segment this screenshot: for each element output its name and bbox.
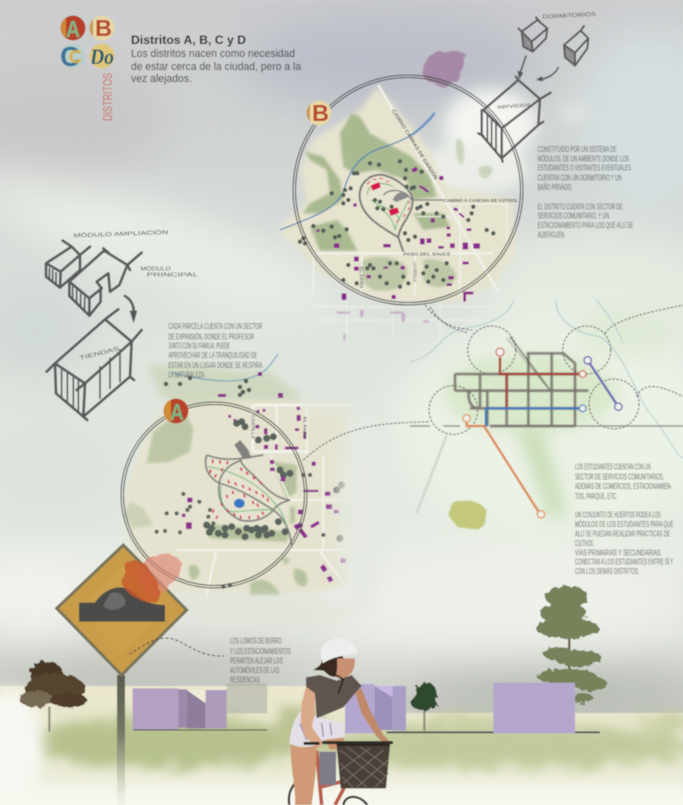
badge: A on map: A	[170, 399, 184, 425]
map B: trees	[300, 161, 493, 287]
purple buildings left	[133, 688, 267, 730]
text: speed bumps description: RESIDENCIAS	[230, 674, 260, 684]
map B: road labels: CAMINO CABRAS DE GARZÓN	[390, 107, 440, 181]
map B: river	[280, 113, 435, 230]
vertical label: DISTRITOS: DISTRITOS	[100, 73, 115, 121]
map: district A	[123, 400, 350, 595]
text: students services description	[575, 462, 674, 576]
cyclist helmet strap	[333, 673, 343, 693]
text: students services description: TOS, PARQUE, ETC.	[575, 491, 617, 501]
badge A: A	[66, 16, 80, 42]
text: district B description: CONSTITUIDO POR UN SISTEMA DE	[538, 144, 617, 154]
purple building right	[493, 683, 575, 733]
plan: red line	[496, 348, 586, 408]
map A: white streets	[177, 405, 350, 595]
map A: buildings	[182, 407, 346, 582]
horizon scene right: buildings, trees, cyclist	[289, 586, 607, 805]
sketch: modulo ampliacion, principal and tiendas	[46, 229, 198, 420]
map B: student blocks	[371, 182, 399, 216]
sketch label: modulo ampliacion: MÓDULO AMPLIACIÓN	[73, 229, 168, 239]
text: speed bumps description: AUTOMÓVILES DE LAS	[230, 665, 280, 675]
map A: land base	[123, 400, 350, 593]
badge: B on map	[306, 100, 332, 126]
bicycle frame	[317, 751, 348, 805]
watercolor blob: orange	[122, 553, 182, 602]
map: district A surroundings	[148, 354, 300, 430]
text: district A description: LA NATURALEZA.	[168, 369, 206, 379]
badge: B on map: B	[312, 100, 329, 126]
map B: faded extension	[313, 300, 493, 341]
dashed link: circle B to plan	[425, 305, 472, 330]
horizon scene left: tree, sign, buildings	[19, 545, 291, 805]
bicycle basket	[337, 745, 390, 788]
sketch label: servicios: servicios	[497, 102, 531, 111]
map A: green paths	[208, 467, 287, 527]
text: district A description: CADA PARCELA CUENTA CON UN SECTOR	[168, 321, 262, 331]
sketch label: modulo principal: PRINCIPAL	[147, 273, 198, 279]
map A: red plots	[210, 460, 268, 518]
plan: blue line	[486, 405, 586, 427]
map B: road labels: EL FARO	[358, 267, 364, 288]
plan: rivers	[410, 300, 683, 458]
sketch label: modulo principal: MÓDULO	[141, 266, 171, 273]
dashed callout from sign to text	[129, 638, 224, 656]
text: speed bumps description: LOS LOMOS DE BURRO	[230, 635, 282, 645]
tree cluster above circle A	[166, 378, 249, 395]
badge C: C	[69, 47, 82, 67]
intro text: vez alejados.	[131, 73, 192, 85]
seat post and saddle area	[319, 752, 336, 785]
sketch label: modulo principal	[141, 266, 198, 279]
left tree	[19, 661, 87, 732]
ground and grass	[0, 686, 683, 805]
cyclist right arm	[355, 688, 392, 746]
text: district A description: APROVECHAR DE LA TRANQUILIDAD DE	[168, 350, 258, 360]
map B: residential loop road	[360, 175, 443, 252]
map B: road labels: CAMINO A CANCHA DE FÚTBOL	[443, 197, 518, 204]
map: district B	[280, 85, 518, 341]
map A: trees	[157, 422, 342, 587]
header icons: district badges	[60, 15, 114, 72]
small dark tree	[411, 683, 437, 731]
map A: road labels: CASTILLA	[249, 415, 255, 439]
circle B outline	[293, 75, 523, 305]
plan: orange line	[463, 415, 545, 518]
intro text: Los distritos nacen como necesidad	[131, 48, 295, 60]
badge: A on map	[164, 398, 188, 425]
text: district B description: BAÑO PRIVADO.	[538, 182, 573, 192]
text: speed bumps description: Y LOS ESTACIONAMIENTOS	[230, 646, 291, 656]
lots above circle A	[218, 372, 283, 398]
map B: road labels: LA CASTILLA	[411, 262, 417, 282]
plan: main road	[410, 423, 683, 428]
text: speed bumps description	[230, 635, 291, 684]
circle A outline	[121, 402, 307, 588]
sketch: servicios module	[478, 77, 551, 162]
sketch: dormitorios and servicios modules	[478, 12, 596, 162]
map B: green paths	[367, 184, 408, 230]
translucent panel behind text	[227, 683, 267, 713]
cyclist left arm	[301, 687, 323, 748]
text: district B description: ALBERGUEN.	[538, 229, 565, 239]
sketch: dormitorio 1	[518, 17, 547, 52]
cyclist hair	[313, 654, 343, 678]
cyclist shorts	[289, 712, 345, 747]
text: district B description: SERVICIOS COMUNITARIO, Y UN	[538, 211, 609, 221]
badge C	[60, 44, 86, 68]
intro text: de estar cerca de la ciudad, pero a la	[131, 61, 302, 73]
map B: road labels	[358, 107, 518, 288]
text: district B description	[538, 144, 634, 239]
text: district A description: DE EXPANSIÓN, DONDE EL PROFESOR	[168, 331, 254, 341]
map A: pond	[234, 499, 245, 508]
sketch: module ampliacion	[46, 241, 90, 288]
map A: vegetation	[123, 408, 307, 595]
purple building middle	[345, 684, 406, 733]
right tall tree	[536, 586, 607, 704]
map B: white streets	[313, 85, 507, 295]
sketch: tiendas module	[47, 309, 142, 420]
map B: road labels: PASO DEL SAUCE	[403, 251, 451, 257]
sketch: module principal	[69, 248, 142, 316]
signpost	[117, 675, 125, 805]
sketch: arrow down	[125, 296, 137, 323]
plan: green surroundings	[443, 310, 670, 520]
sketch: arrows to servicios	[517, 56, 558, 81]
map B: red dots	[367, 178, 409, 222]
text: district A description: JUNTO CON SU FAMILIA, PUEDE	[168, 341, 230, 351]
bicycle wheels	[289, 783, 367, 805]
stream above circle A	[170, 354, 278, 381]
badge C: C	[60, 41, 80, 72]
text: district A description	[168, 321, 263, 379]
urban plan: road network and connections	[303, 300, 683, 520]
badge B: B	[95, 15, 112, 41]
cyclist	[289, 638, 392, 805]
map B: land base	[280, 87, 515, 302]
watercolor blob: olive	[449, 501, 487, 528]
plan: district connection dashes	[303, 305, 683, 460]
sketch label: dormitorios: DORMITORIOS	[542, 12, 596, 21]
plan: street grid	[455, 337, 588, 426]
sketch label: tiendas: TIENDAS	[79, 346, 120, 362]
text: district A description: ESTAR EN UN LUGAR DONDE SE RESPIRA	[168, 360, 263, 370]
cyclist neck and face	[335, 658, 355, 680]
badge D: Do	[89, 44, 114, 69]
vegetation patch above circle A	[148, 365, 300, 430]
watercolor blob: purple	[422, 51, 468, 86]
intro text	[131, 48, 302, 85]
map B: buildings	[317, 167, 480, 302]
sketch: dormitorio 2	[564, 26, 588, 66]
cyclist shirt	[306, 675, 362, 718]
text: students services description: CULTIVOS.	[575, 538, 594, 548]
cyclist leg	[291, 743, 317, 805]
speed bump road sign	[57, 545, 187, 675]
heading: Distritos A, B, C y D	[131, 33, 246, 47]
plan: purple line	[584, 357, 622, 410]
bicycle handlebar	[305, 738, 392, 748]
map B: vegetation	[303, 113, 492, 291]
map A: road labels: EL FARO	[301, 417, 307, 439]
map A: residential loop road	[206, 455, 292, 545]
cyclist helmet	[321, 638, 358, 663]
map A: road labels	[249, 415, 307, 439]
ground line	[387, 730, 600, 735]
text: speed bumps description: PERMITEN ALEJAR LOS	[230, 655, 283, 665]
